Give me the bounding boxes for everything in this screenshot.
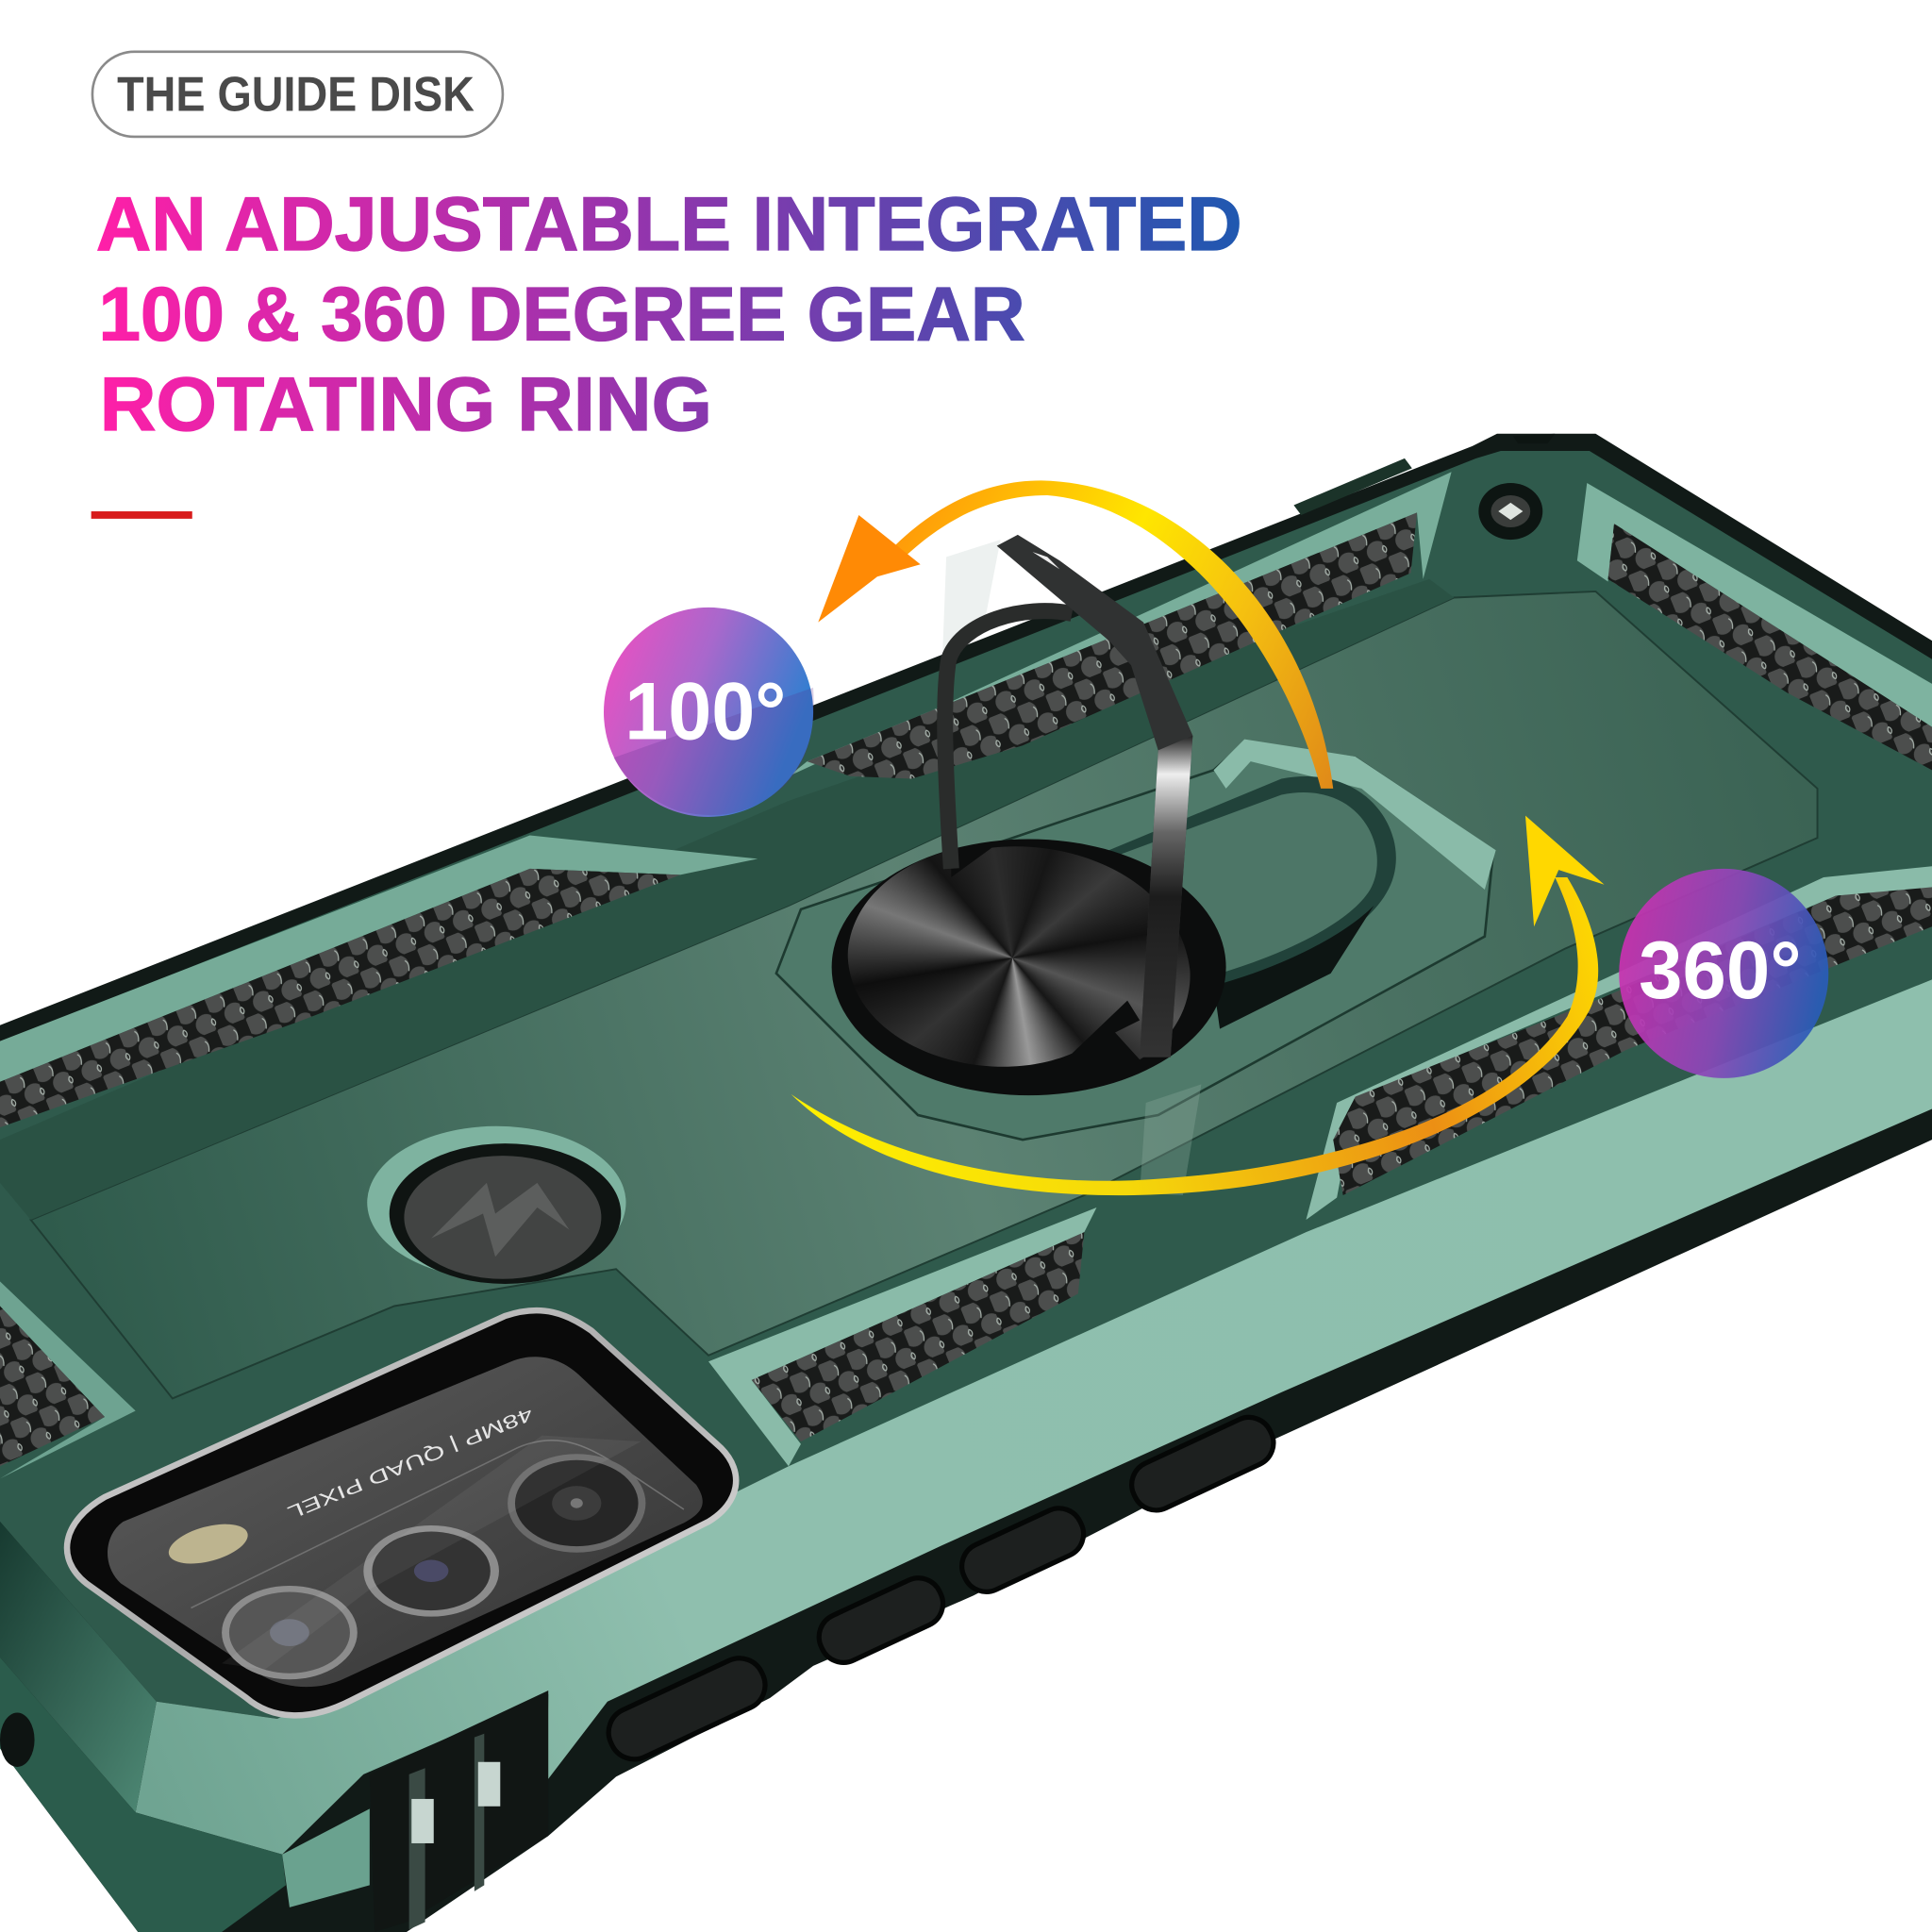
- upper dark band: [0, 579, 1454, 1220]
- ring holder: [832, 535, 1226, 1095]
- grip pattern areas: [808, 512, 1417, 778]
- red accent bar: [92, 511, 192, 519]
- lens 1: [222, 1586, 358, 1679]
- clear glass tab: [942, 540, 1001, 653]
- ring holder hexagon frame: [776, 740, 1496, 1195]
- top edge buttons: [1293, 458, 1412, 515]
- badge: 100 degrees: 100°: [625, 667, 786, 758]
- left facet: [0, 1522, 157, 1812]
- conic metal disk: [847, 846, 1191, 1067]
- lower facet: [0, 1657, 286, 1932]
- case silhouette: [0, 434, 1932, 1932]
- side buttons: [601, 1409, 1281, 1767]
- grip strips: [0, 472, 1932, 1478]
- ring inner arch: [945, 611, 1072, 869]
- heading: [96, 182, 1242, 447]
- heading: AN ADJUSTABLE INTEGRATED: [96, 182, 1242, 267]
- badge: 360 degrees: 360°: [1639, 925, 1802, 1016]
- lens 2: [363, 1525, 499, 1617]
- lens 3: [508, 1454, 645, 1553]
- inner camera bump line: [191, 1441, 684, 1607]
- tag: the guide disk: THE GUIDE DISK: [117, 68, 475, 123]
- arrow: 100 degree: [818, 480, 1333, 789]
- corner screw hole: [1478, 483, 1542, 540]
- light rim: [136, 979, 1932, 1855]
- reflection: [1140, 1084, 1201, 1195]
- disk rim: [832, 839, 1226, 1095]
- heading: ROTATING RING: [100, 362, 712, 447]
- arrow: 360 degree: [791, 816, 1605, 1195]
- badge: 360 degrees: [1619, 869, 1828, 1078]
- case body: [0, 451, 1932, 1719]
- badge: 100 degrees: [604, 608, 814, 817]
- ring silver highlight: [1140, 736, 1192, 1058]
- tag: the guide disk: [92, 52, 503, 137]
- phone case: [0, 434, 1932, 1932]
- charging port tabs: [370, 1690, 548, 1932]
- camera text: 48MP | QUAD PIXEL: [284, 1403, 536, 1523]
- inner panel: [31, 591, 1818, 1398]
- heading: 100 & 360 DEGREE GEAR: [98, 272, 1025, 357]
- flash: [164, 1517, 252, 1571]
- headphone jack: [0, 1713, 35, 1767]
- ring outer strap: [997, 535, 1192, 1058]
- trims: [789, 472, 1452, 776]
- logo: [367, 1126, 626, 1284]
- glass reflection: [222, 1436, 641, 1670]
- camera module: [67, 1310, 736, 1715]
- recess: [1109, 776, 1396, 991]
